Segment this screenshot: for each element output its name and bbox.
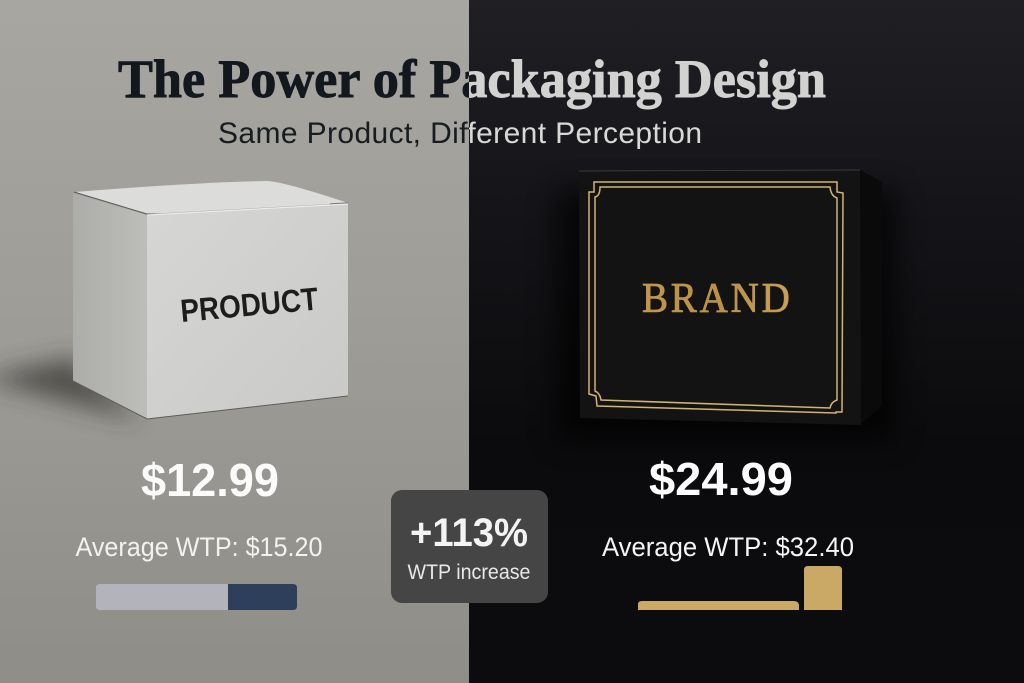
callout: WTP increase badge — [391, 490, 548, 603]
box front face — [147, 204, 348, 419]
box label: PRODUCT: PRODUCT — [179, 281, 320, 329]
plain price: $12.99 — [141, 454, 279, 506]
icon: black brand box — [556, 170, 896, 440]
title: The Power of Packaging Design — [118, 49, 826, 109]
box right side — [860, 170, 882, 425]
plain average WTP: Average WTP: $15.20 — [76, 532, 322, 562]
plain WTP bar — [96, 584, 297, 610]
panel: premium packaging background — [469, 0, 1024, 683]
gold double border — [589, 182, 843, 413]
box front face — [579, 170, 861, 425]
panel: plain packaging background — [0, 0, 469, 683]
box top flap — [74, 181, 348, 214]
box left side — [73, 193, 147, 419]
increase caption: WTP increase — [408, 561, 530, 584]
title: The Power of Packaging Design — [118, 49, 826, 109]
premium average WTP: Average WTP: $32.40 — [602, 532, 854, 562]
subtitle: Same Product, Different Perception — [218, 117, 702, 150]
increase percentage: +113% — [410, 511, 528, 555]
subtitle: Same Product, Different Perception — [218, 117, 702, 150]
icon: white product box — [0, 181, 348, 420]
premium WTP bar — [638, 566, 842, 610]
premium price: $24.99 — [649, 453, 793, 505]
box label: BRAND: BRAND — [642, 275, 790, 321]
